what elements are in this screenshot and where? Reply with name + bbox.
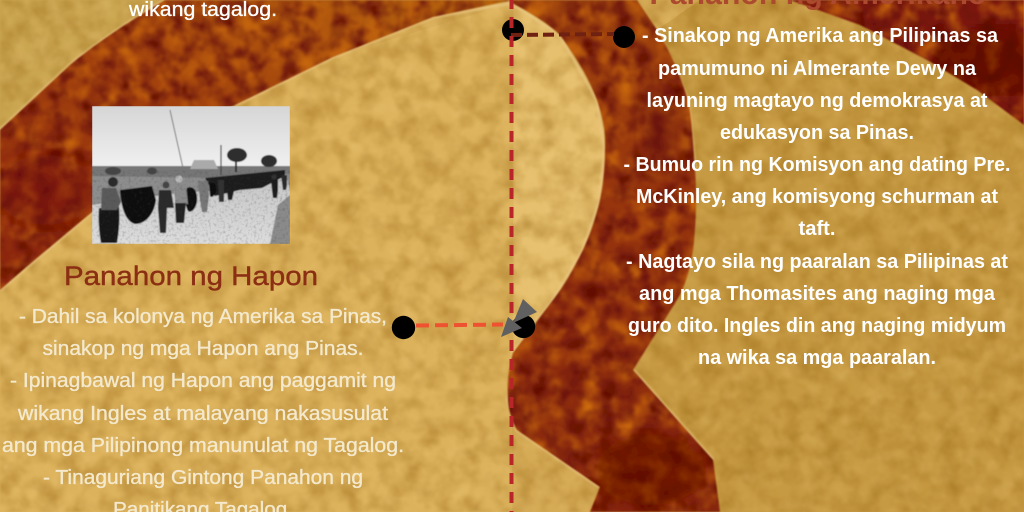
text block: Panahon ng Amerikano: - Sinakop ng Amerika ang Pilipinas sa	[642, 25, 999, 47]
text block: Panahon ng Amerikano: - Bumuo rin ng Komisyon ang dating Pre.	[624, 154, 1010, 176]
timeline: vertical dashed line	[510, 0, 514, 512]
text block: Panahon ng Amerikano: na wika sa mga paaralan.	[698, 347, 936, 369]
text block: Panahon ng Hapon	[2, 306, 404, 512]
text block: Panahon ng Amerikano: guro dito. Ingles din ang naging midyum	[628, 315, 1006, 337]
text block: Panahon ng Amerikano: ang mga Thomasites ang naging mga	[639, 283, 996, 305]
text block: Panahon ng Hapon: ang mga Pilipinong manunulat ng Tagalog.	[2, 435, 404, 457]
text block: Panahon ng Amerikano: McKinley, ang komisyong schurman at	[636, 186, 998, 208]
photo: marching soldiers	[92, 106, 290, 244]
text block: Panahon ng Amerikano: - Nagtayo sila ng paaralan sa Pilipinas at	[626, 251, 1008, 273]
text block: Panahon ng Amerikano: layuning magtayo ng demokrasya at	[646, 90, 988, 112]
text block: Panahon ng Amerikano: taft.	[798, 218, 836, 240]
text block: Panahon ng Hapon: wikang Ingles at malayang nakasusulat	[17, 403, 388, 425]
icon: grey arrowheads	[501, 299, 537, 337]
edge highlights	[0, 0, 713, 487]
text block: Panahon ng Hapon: - Tinaguriang Gintong Panahon ng	[43, 467, 363, 489]
marker: middle dots	[392, 315, 535, 339]
text block: Panahon ng Amerikano: edukasyon sa Pinas.	[720, 122, 914, 144]
heading: Panahon ng Hapon: Panahon ng Hapon	[64, 261, 318, 291]
connector: middle dashed line	[416, 324, 503, 326]
connector: top dashed line	[511, 34, 614, 35]
marker: top dots	[502, 19, 635, 48]
text block: Panahon ng Amerikano: pamumuno ni Almerante Dewy na	[658, 58, 977, 80]
text block: Panahon ng Hapon: - Dahil sa kolonya ng Amerika sa Pinas,	[19, 306, 387, 328]
text block: Panahon ng Hapon: - Ipinagbawal ng Hapon ang paggamit ng	[10, 370, 396, 392]
text block: Panahon ng Hapon: sinakop ng mga Hapon ang Pinas.	[42, 338, 363, 360]
text block: Panahon ng Amerikano	[624, 25, 1010, 369]
